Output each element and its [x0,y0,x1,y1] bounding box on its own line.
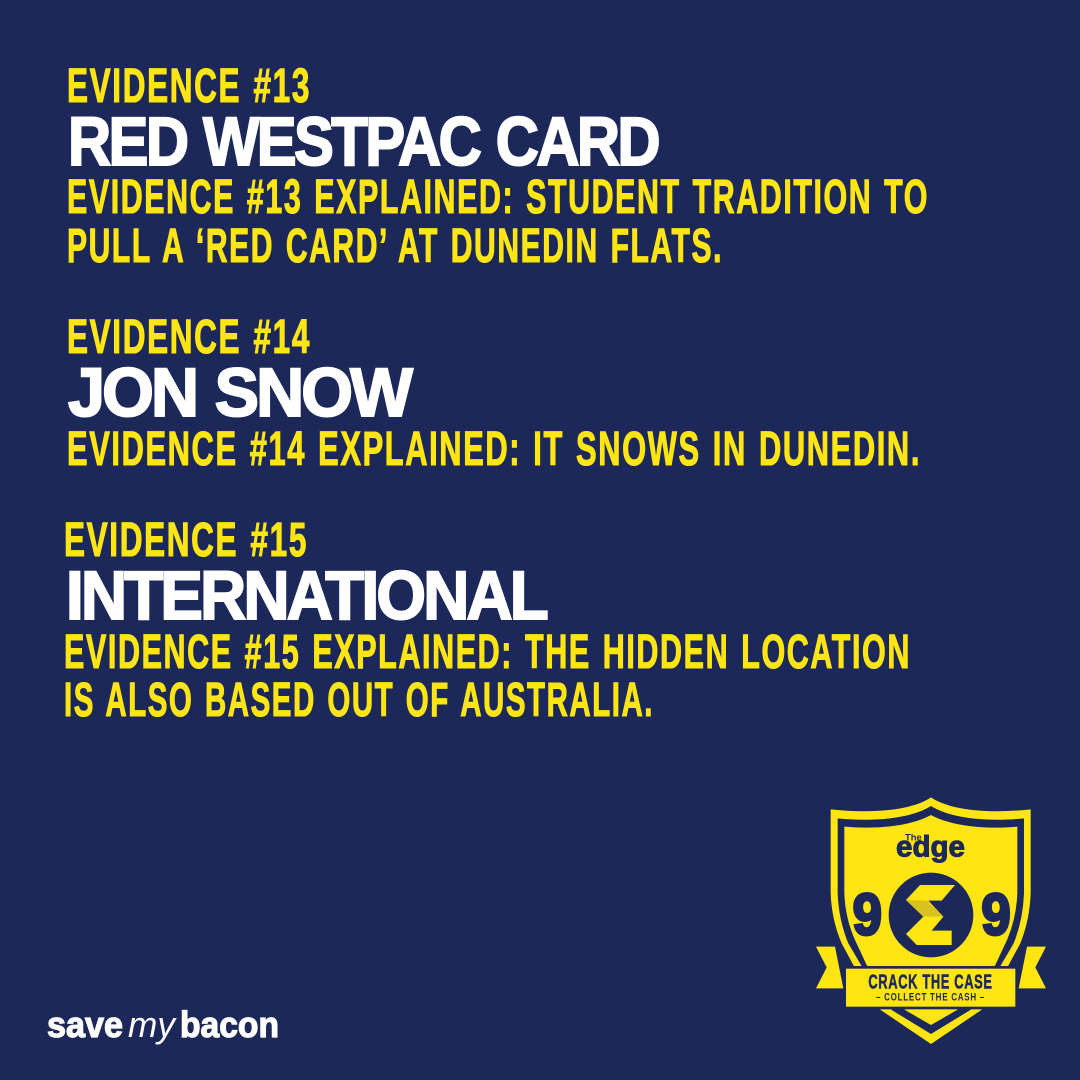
evidence 15 title: INTERNATIONAL [66,557,548,634]
savemybacon logo [47,1004,279,1045]
shield inner [844,815,1017,1025]
edge wordmark: The [905,833,922,843]
badge: The Edge crack the case shield [816,797,1046,1044]
evidence 14 block [67,311,921,476]
ribbon tails [816,947,1046,988]
banner [843,966,1018,1009]
number nines [853,882,1011,947]
evidence 14 label: EVIDENCE #14 [67,311,311,364]
shield outer [831,797,1031,1044]
shield navy border [838,806,1024,1034]
evidence 14 title: JON SNOW [68,354,414,431]
evidence 15 block [64,514,911,727]
number nines: 9 [853,882,882,947]
number nines: 9 [981,882,1011,947]
savemybacon logo: save [47,1004,123,1045]
banner: – COLLECT THE CASH – [876,992,985,1004]
savemybacon logo: bacon [180,1004,279,1045]
evidence 13 title: RED WESTPAC CARD [68,103,658,180]
evidence 13 block [67,60,929,273]
edge wordmark: edge [896,831,965,864]
savemybacon logo: my [128,1004,177,1045]
evidence 13 label: EVIDENCE #13 [67,60,311,113]
evidence 15 explanation: IS ALSO BASED OUT OF AUSTRALIA. [64,674,654,727]
sigma roundel [889,873,973,957]
evidence 15 label: EVIDENCE #15 [64,514,308,567]
